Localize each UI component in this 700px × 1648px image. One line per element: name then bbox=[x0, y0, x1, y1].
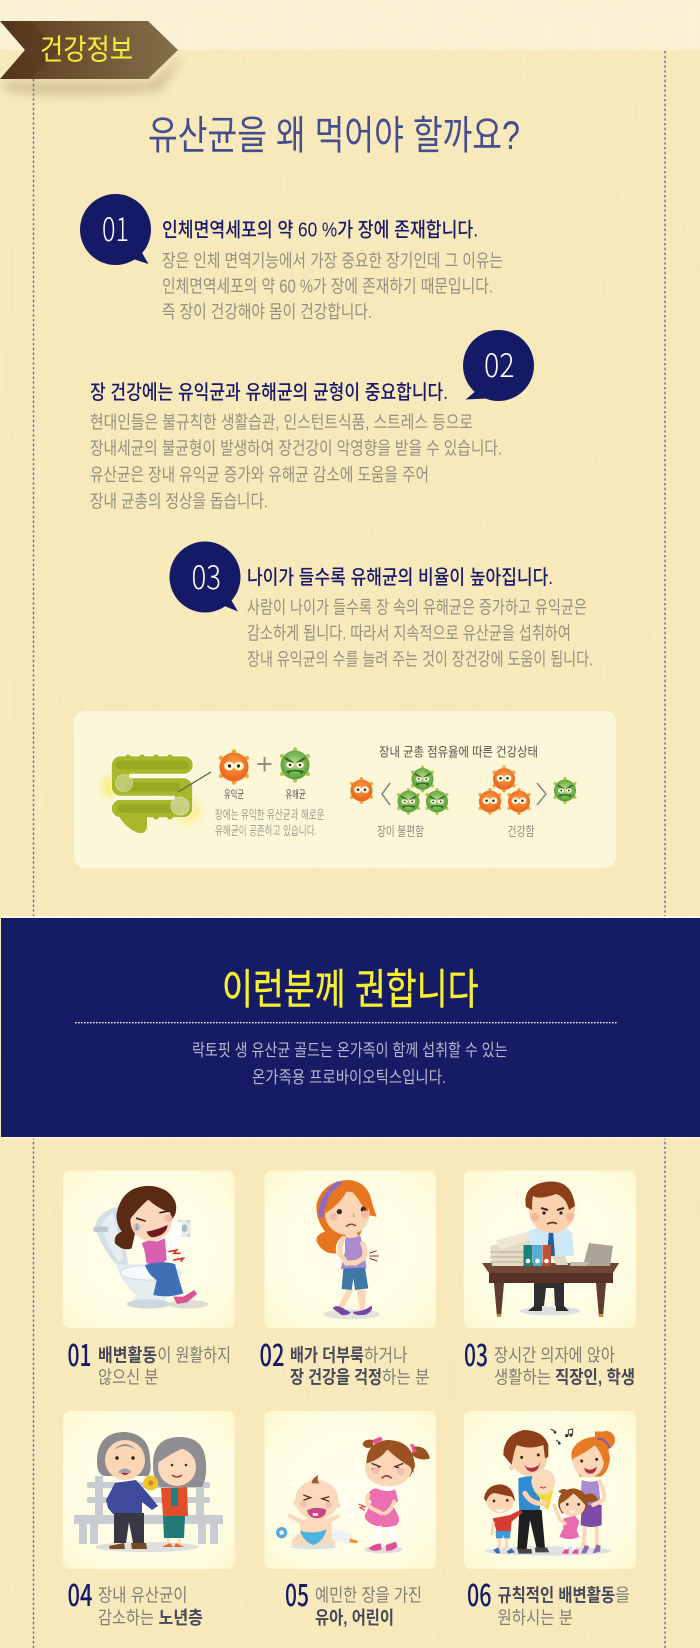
caption 03: 장시간 의자에 앉아 bbox=[494, 1346, 615, 1366]
caption 05: 예민한 장을 가진 bbox=[315, 1586, 422, 1606]
bubble 01: 01 bbox=[102, 205, 129, 251]
caption 06: 을 bbox=[615, 1586, 630, 1606]
caption 03: 직장인, 학생 bbox=[555, 1368, 635, 1388]
body 03: 감소하게 됩니다. 따라서 지속적으로 유산균을 섭취하여 bbox=[247, 624, 571, 644]
bubble 01 bbox=[80, 194, 151, 265]
banner text: 락토핏 생 유산균 골드는 온가족이 함께 섭취할 수 있는 bbox=[192, 1041, 508, 1060]
number 05: 05 bbox=[285, 1571, 309, 1615]
body 02: 현대인들은 불규칙한 생활습관, 인스턴트식품, 스트레스 등으로 bbox=[90, 412, 473, 432]
body 02: 유산균은 장내 유익균 증가와 유해균 감소에 도움을 주어 bbox=[90, 465, 429, 485]
bubble 02 bbox=[463, 330, 534, 401]
section 02 bbox=[90, 330, 534, 512]
heading 01: 인체면역세포의 약 60 %가 장에 존재합니다. bbox=[162, 218, 478, 242]
illustration: crying baby and child bbox=[276, 1437, 430, 1553]
banner title: 이런분께 권합니다 bbox=[222, 966, 478, 1013]
body 01: 즉 장이 건강해야 몸이 건강합니다. bbox=[162, 302, 372, 322]
label: 건강함: 건강함 bbox=[508, 824, 535, 839]
number 01: 01 bbox=[68, 1331, 92, 1375]
number 06: 06 bbox=[467, 1571, 492, 1615]
body 02: 장내세균의 불균형이 발생하여 장건강이 악영향을 받을 수 있습니다. bbox=[90, 438, 502, 458]
illustration: girl with stomachache bbox=[316, 1180, 380, 1319]
caption 02: 하는 분 bbox=[382, 1368, 430, 1388]
caption 04: 노년층 bbox=[158, 1608, 203, 1628]
bubble 02: 02 bbox=[484, 341, 514, 387]
body 02: 장내 균총의 정상을 돕습니다. bbox=[90, 492, 268, 512]
body 03: 사람이 나이가 들수록 장 속의 유해균은 증가하고 유익균은 bbox=[247, 598, 587, 618]
caption 05: 유아, 어린이 bbox=[315, 1608, 394, 1628]
heading 03: 나이가 들수록 유해균의 비율이 높아집니다. bbox=[247, 566, 553, 589]
number 04: 04 bbox=[68, 1571, 92, 1615]
label: 유익균: 유익균 bbox=[224, 788, 244, 801]
section 01 bbox=[80, 194, 503, 322]
caption 04 bbox=[98, 1586, 203, 1628]
caption 06: 원하시는 분 bbox=[498, 1608, 573, 1628]
chart heading: 장내 균총 점유율에 따른 건강상태 bbox=[379, 744, 538, 760]
card 01 bbox=[63, 1170, 234, 1388]
ribbon: 건강정보 bbox=[0, 21, 185, 95]
illustration: woman on toilet bbox=[93, 1186, 208, 1309]
caption: 장에는 유익한 유산균과 해로운 bbox=[215, 808, 324, 822]
banner text: 온가족용 프로바이오틱스입니다. bbox=[252, 1068, 446, 1087]
banner bbox=[0, 916, 700, 1138]
caption 01: 이 원활하지 bbox=[158, 1346, 231, 1366]
body 03 bbox=[247, 598, 593, 670]
caption bbox=[215, 808, 324, 838]
caption 04: 감소하는 bbox=[98, 1608, 154, 1628]
card 03 bbox=[464, 1170, 636, 1388]
label: 장이 불편함: 장이 불편함 bbox=[377, 824, 424, 839]
body 02 bbox=[90, 412, 502, 512]
balance: healthy bbox=[478, 766, 577, 815]
illustration: office worker at desk bbox=[482, 1182, 619, 1317]
banner text bbox=[192, 1041, 508, 1087]
icon: harmful bacteria bbox=[280, 747, 310, 783]
caption 04: 장내 유산균이 bbox=[98, 1586, 188, 1606]
caption 02: 장 건강을 걱정 bbox=[290, 1368, 382, 1388]
ribbon: 건강정보: 건강정보 bbox=[40, 34, 133, 66]
caption 06 bbox=[498, 1586, 630, 1628]
number 02: 02 bbox=[260, 1331, 284, 1375]
caption 03: 생활하는 bbox=[494, 1368, 551, 1388]
plus sign bbox=[258, 757, 272, 772]
caption 02: 배가 더부룩 bbox=[290, 1346, 364, 1366]
label: 유해균: 유해균 bbox=[286, 787, 306, 801]
body 01: 장은 인체 면역기능에서 가장 중요한 장기인데 그 이유는 bbox=[162, 251, 503, 271]
icon: beneficial bacteria bbox=[219, 749, 249, 785]
illustration: elderly couple on a bench bbox=[74, 1432, 223, 1552]
panel: gut flora diagram bbox=[74, 711, 616, 868]
bubble 03 bbox=[170, 542, 240, 612]
number 03: 03 bbox=[464, 1331, 488, 1375]
body 01 bbox=[162, 251, 503, 322]
caption 03 bbox=[494, 1346, 635, 1388]
caption 06: 규칙적인 배변활동 bbox=[498, 1586, 615, 1606]
caption 01: 않으신 분 bbox=[98, 1368, 158, 1388]
caption 02 bbox=[290, 1346, 430, 1388]
caption 01 bbox=[98, 1346, 231, 1388]
card 02 bbox=[260, 1170, 436, 1388]
bubble 03: 03 bbox=[192, 553, 221, 599]
heading 02: 장 건강에는 유익균과 유해균의 균형이 중요합니다. bbox=[90, 381, 448, 404]
body 03: 장내 유익균의 수를 늘려 주는 것이 장건강에 도움이 됩니다. bbox=[247, 650, 593, 670]
title: 유산균을 왜 먹어야 할까요? bbox=[148, 114, 520, 158]
card 04 bbox=[63, 1411, 234, 1628]
body 01: 인체면역세포의 약 60 %가 장에 존재하기 때문입니다. bbox=[162, 276, 493, 296]
caption 02: 하거나 bbox=[364, 1346, 408, 1366]
caption 01: 배변활동 bbox=[98, 1346, 157, 1366]
caption 05 bbox=[315, 1586, 422, 1628]
card 06 bbox=[464, 1411, 636, 1628]
balance: unhealthy bbox=[350, 766, 449, 815]
caption: 유해균이 공존하고 있습니다. bbox=[215, 824, 317, 838]
illustration: happy family bbox=[484, 1429, 615, 1556]
icon: intestine bbox=[96, 754, 211, 833]
section 03 bbox=[170, 542, 593, 670]
card 05 bbox=[264, 1411, 436, 1628]
